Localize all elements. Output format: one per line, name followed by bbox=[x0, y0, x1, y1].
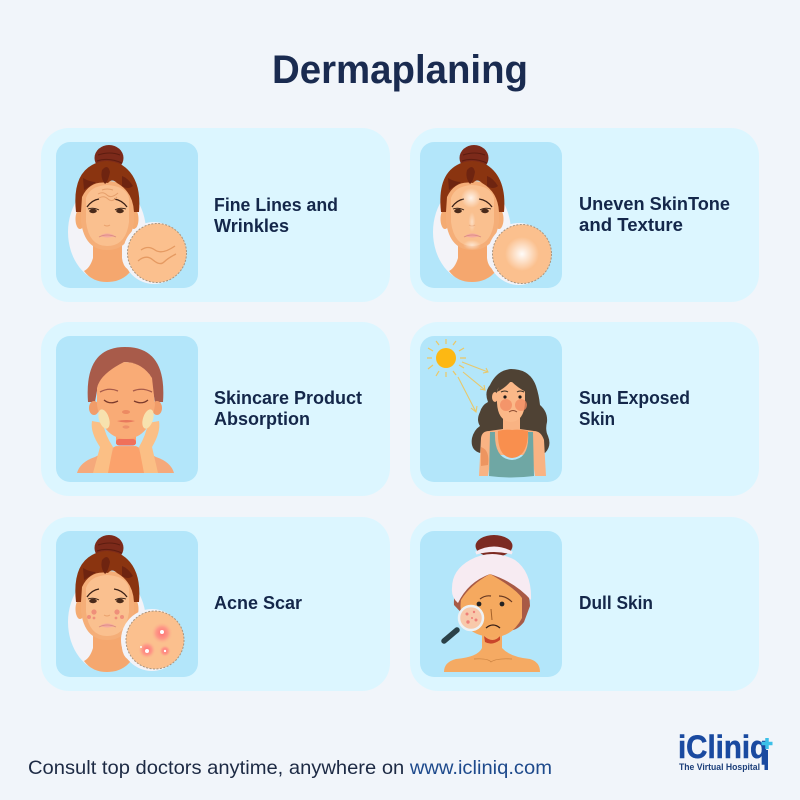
label line two: Absorption bbox=[214, 409, 310, 429]
logo: iCliniq: iCliniq bbox=[678, 729, 768, 765]
icon: woman with forehead wrinkles bbox=[68, 145, 186, 284]
panel: fine lines and wrinkles bbox=[41, 128, 390, 302]
panel: sun exposed skin bbox=[410, 322, 759, 496]
label: fine lines and wrinkles: Fine Lines and bbox=[214, 195, 338, 215]
label line two: Wrinkles bbox=[214, 216, 289, 236]
icon: woman with uneven skin tone bbox=[433, 145, 552, 285]
panel: acne scar bbox=[41, 517, 390, 691]
title: Dermaplaning bbox=[272, 48, 528, 92]
icon: woman with acne bbox=[68, 535, 184, 672]
icon: sun with rays bbox=[427, 339, 466, 377]
footer text: Consult top doctors anytime, anywhere on www.icliniq.com bbox=[28, 757, 552, 779]
label line two: Skin bbox=[579, 409, 615, 429]
icon: woman with towel and magnifier bbox=[444, 535, 540, 672]
icon: woman applying product bbox=[77, 347, 174, 473]
panel: uneven skin tone and texture bbox=[410, 128, 759, 302]
label: acne scar: Acne Scar bbox=[214, 593, 302, 613]
label: skincare product: Skincare Product bbox=[214, 388, 362, 408]
arrows: sun rays bbox=[458, 362, 488, 412]
panel: dull skin bbox=[410, 517, 759, 691]
panel: skincare product absorption bbox=[41, 322, 390, 496]
label: uneven skintone: Uneven SkinTone bbox=[579, 194, 730, 214]
label: sun exposed: Sun Exposed bbox=[579, 388, 690, 408]
icon: sun and woman bbox=[427, 339, 549, 478]
logo: iCliniq: The Virtual Hospital bbox=[679, 762, 760, 772]
label line two: and Texture bbox=[579, 215, 683, 235]
label: dull skin: Dull Skin bbox=[579, 593, 653, 613]
